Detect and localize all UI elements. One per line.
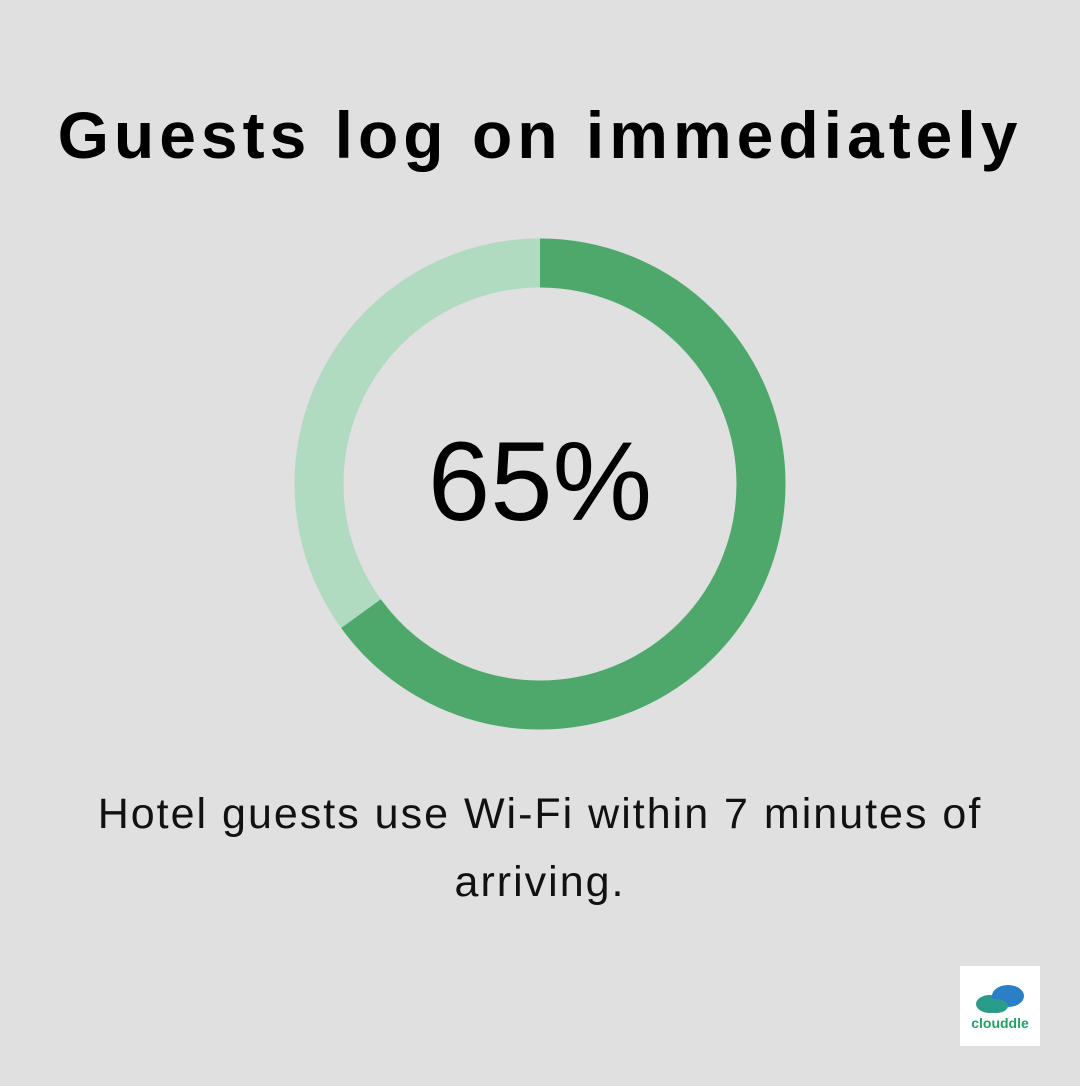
title: Guests log on immediately — [58, 98, 1022, 172]
logo: clouddle — [971, 1015, 1029, 1031]
donut chart: 65% — [428, 419, 652, 544]
description text: Hotel guests use Wi-Fi within 7 minutes of — [98, 790, 982, 838]
description text — [98, 790, 982, 906]
description text: arriving. — [455, 858, 625, 906]
logo — [960, 966, 1040, 1046]
